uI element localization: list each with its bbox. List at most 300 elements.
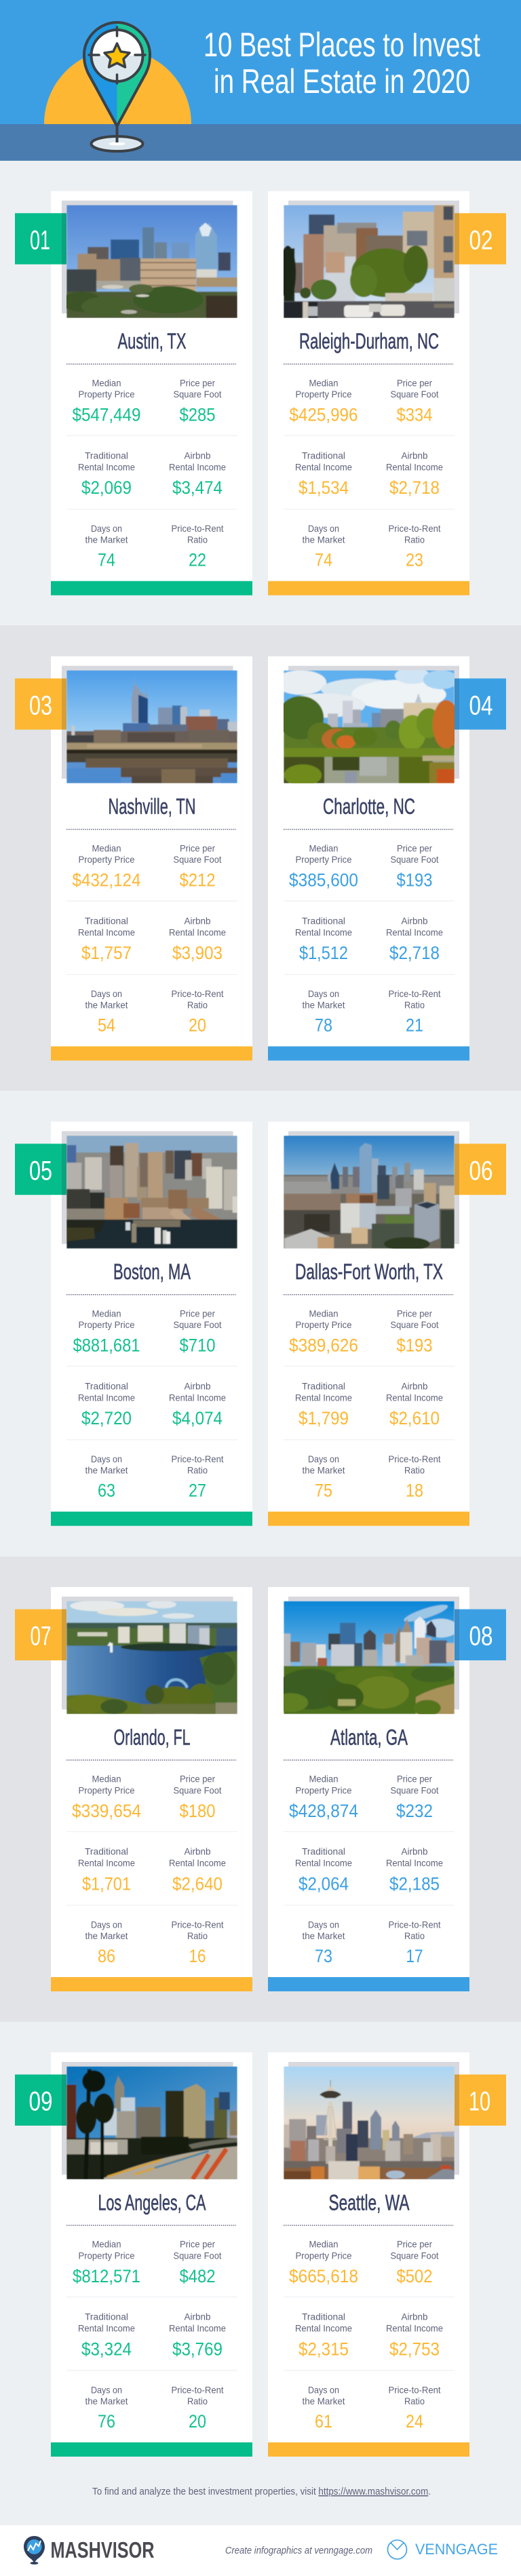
stat: price per square foot: $482 (179, 2266, 216, 2286)
icon: orange sun arch (44, 50, 191, 124)
stat: traditional rental income: $1,757 (81, 943, 132, 963)
card 02: Raleigh-Durham (268, 191, 506, 596)
stat: traditional rental income: Traditional (85, 450, 128, 461)
stat: days on the market: the Market (303, 1930, 345, 1941)
stat: airbnb rental income: Rental Income (386, 461, 443, 472)
stat: median property price: Property Price (296, 1319, 352, 1330)
stat: median property price (73, 2239, 140, 2286)
stat: days on the market: Days on (308, 523, 339, 534)
stat: price-to-rent ratio: Price-to-Rent (171, 523, 224, 534)
stat: traditional rental income: $1,512 (299, 943, 348, 963)
stat: traditional rental income: Traditional (85, 915, 128, 926)
colour bar (268, 1512, 469, 1526)
photo: Seattle skyline (284, 2066, 455, 2180)
stat: median property price: Median (92, 1774, 121, 1784)
stat: median property price (289, 377, 358, 425)
stat: median property price (72, 842, 141, 891)
stat: price-to-rent ratio: Price-to-Rent (171, 1919, 224, 1930)
header banner (0, 0, 521, 161)
stat: price-to-rent ratio (388, 988, 441, 1036)
stat: airbnb rental income: Airbnb (402, 450, 428, 461)
stat: traditional rental income: Rental Income (295, 461, 352, 472)
stat: airbnb rental income (169, 915, 226, 963)
rank badge 01 (15, 213, 66, 265)
stat: airbnb rental income (386, 450, 443, 498)
city name: Boston, MA (113, 1260, 191, 1284)
stat: traditional rental income (78, 450, 135, 498)
stat: price per square foot: Square Foot (174, 854, 222, 865)
stat: price-to-rent ratio: 27 (189, 1481, 206, 1501)
stat: median property price: Property Price (296, 2250, 352, 2261)
stat: airbnb rental income: Airbnb (402, 1380, 428, 1391)
rank badge 04 (455, 678, 506, 730)
stat: median property price: Median (309, 842, 338, 853)
title (204, 26, 480, 100)
stat: airbnb rental income: $2,718 (389, 943, 440, 963)
stat: price-to-rent ratio: 18 (406, 1481, 423, 1501)
stat: median property price: Median (92, 2239, 121, 2250)
stat: traditional rental income: $2,069 (81, 477, 132, 498)
stat: price-to-rent ratio: 24 (406, 2411, 423, 2432)
stat: price per square foot: Square Foot (391, 389, 439, 399)
stat: price per square foot (391, 377, 439, 425)
city name: Dallas-Fort Worth, TX (295, 1260, 443, 1284)
stat: median property price: Property Price (296, 389, 352, 399)
stat: traditional rental income: Rental Income (295, 1392, 352, 1403)
stat: price-to-rent ratio: 16 (189, 1946, 206, 1966)
colour bar (51, 1047, 252, 1061)
stat: price-to-rent ratio: Price-to-Rent (171, 1453, 224, 1464)
stat: days on the market: Days on (308, 1919, 339, 1930)
stat: median property price: Property Price (79, 1319, 135, 1330)
stat: price per square foot (391, 2239, 439, 2286)
stat: price per square foot (174, 842, 222, 891)
stat: price per square foot: Price per (180, 1774, 215, 1784)
stat: price-to-rent ratio (388, 1453, 441, 1501)
stat: price per square foot: $285 (179, 405, 216, 425)
stat: price-to-rent ratio (388, 1919, 441, 1966)
stat: price-to-rent ratio (388, 523, 441, 570)
rank badge 07 (15, 1609, 66, 1660)
stat: price per square foot (174, 377, 222, 425)
stat: price-to-rent ratio: Price-to-Rent (171, 2384, 224, 2395)
card 04: Charlotte (268, 657, 506, 1061)
stat: price per square foot: Square Foot (174, 2250, 222, 2261)
stat: days on the market: the Market (85, 1000, 128, 1011)
rank badge 05 (15, 1144, 66, 1195)
stat: traditional rental income: Traditional (302, 450, 345, 461)
stat: traditional rental income: Rental Income (78, 926, 135, 937)
rank badge 10: 10 (469, 2087, 490, 2117)
stat: airbnb rental income (169, 1846, 226, 1894)
stat: median property price: $665,618 (289, 2266, 358, 2286)
stat: airbnb rental income: Rental Income (169, 1392, 226, 1403)
stat: price per square foot: Price per (397, 2239, 432, 2250)
stat: airbnb rental income: $2,610 (389, 1408, 440, 1428)
stat: price-to-rent ratio: Ratio (404, 534, 425, 545)
stat: traditional rental income (295, 2311, 352, 2359)
stat: days on the market (85, 1919, 128, 1966)
stat: price per square foot: Square Foot (391, 1784, 439, 1795)
stat: days on the market: Days on (91, 523, 122, 534)
stat: price per square foot: Price per (180, 2239, 215, 2250)
stat: days on the market: 73 (315, 1946, 332, 1966)
stat: days on the market: the Market (303, 534, 345, 545)
stat: price per square foot: Square Foot (174, 1784, 222, 1795)
stat: price per square foot: Price per (180, 377, 215, 388)
card 01: Austin (15, 191, 252, 596)
stat: traditional rental income (295, 1380, 352, 1428)
colour bar (51, 1512, 252, 1526)
stat: traditional rental income (78, 2311, 135, 2359)
stat: traditional rental income: Rental Income (78, 1392, 135, 1403)
stat: days on the market: Days on (91, 988, 122, 999)
stat: median property price: $425,996 (289, 405, 358, 425)
stat: median property price: Median (309, 1308, 338, 1319)
stat: days on the market: 76 (98, 2411, 115, 2432)
stat: price-to-rent ratio: Price-to-Rent (171, 988, 224, 999)
icon: Mashvisor pin logo (24, 2536, 45, 2564)
stat: price-to-rent ratio (171, 988, 224, 1036)
rank badge 03: 03 (29, 690, 52, 720)
stat: airbnb rental income: $3,474 (172, 477, 223, 498)
photo: Boston harbor (66, 1135, 237, 1249)
stat: traditional rental income (295, 915, 352, 963)
stat: days on the market: 54 (98, 1015, 115, 1036)
stat: airbnb rental income (169, 2311, 226, 2359)
stat: days on the market: 61 (315, 2411, 332, 2432)
icon: map pin with star (84, 22, 150, 151)
stat: traditional rental income: Traditional (302, 1846, 345, 1857)
stat: traditional rental income (78, 1846, 135, 1894)
stat: airbnb rental income: Airbnb (185, 2311, 211, 2322)
rank badge 03 (15, 678, 66, 730)
stat: price-to-rent ratio: Price-to-Rent (388, 1919, 441, 1930)
stat: traditional rental income: Rental Income (295, 2323, 352, 2334)
stat: days on the market (303, 2384, 345, 2432)
stat: price per square foot: $212 (179, 870, 216, 891)
stat: airbnb rental income (386, 915, 443, 963)
stat: days on the market: the Market (303, 1000, 345, 1011)
stat: days on the market (85, 1453, 128, 1501)
stat: price-to-rent ratio: 20 (189, 2411, 206, 2432)
Mashvisor wordmark: MASHVISOR (50, 2537, 155, 2562)
stat: traditional rental income: Traditional (302, 915, 345, 926)
stat: price per square foot (391, 842, 439, 891)
photo: Austin skyline (66, 205, 237, 318)
stat: median property price: Median (309, 2239, 338, 2250)
stat: price per square foot: Price per (180, 842, 215, 853)
colour bar (268, 2442, 469, 2457)
colour bar (268, 1047, 469, 1061)
card 06: Dallas-Fort Worth (268, 1122, 506, 1526)
stat: median property price: Property Price (79, 389, 135, 399)
stat: price-to-rent ratio: Ratio (404, 1465, 425, 1476)
rank badge 02 (455, 213, 506, 265)
stat: days on the market: the Market (303, 2396, 345, 2406)
stat: median property price: $339,654 (72, 1801, 141, 1821)
stat: airbnb rental income: $2,185 (389, 1873, 440, 1894)
stat: median property price: $428,874 (289, 1801, 358, 1821)
stat: price-to-rent ratio (171, 1919, 224, 1966)
stat: price-to-rent ratio (171, 1453, 224, 1501)
stat: days on the market: 74 (98, 550, 115, 570)
stat: median property price: Median (92, 1308, 121, 1319)
stat: median property price: $812,571 (73, 2266, 140, 2286)
stat: median property price (289, 1308, 358, 1356)
stat: airbnb rental income: Rental Income (169, 926, 226, 937)
stat: traditional rental income: Traditional (302, 2311, 345, 2322)
colour bar (51, 1977, 252, 1991)
colour bar (268, 581, 469, 596)
stat: days on the market: Days on (308, 1453, 339, 1464)
stat: airbnb rental income: Rental Income (386, 1858, 443, 1869)
stat: traditional rental income: $1,799 (298, 1408, 349, 1428)
closing note: To find and analyze the best investment properties, visit https://www.mashvisor.com. (92, 2486, 431, 2497)
stat: days on the market: 78 (315, 1015, 332, 1036)
stat: median property price: Median (92, 842, 121, 853)
stat: price per square foot: Price per (180, 1308, 215, 1319)
stat: days on the market (303, 1453, 345, 1501)
stat: traditional rental income: $2,720 (81, 1408, 132, 1428)
stat: price-to-rent ratio: 17 (406, 1946, 423, 1966)
rank badge 04: 04 (469, 690, 493, 720)
stat: price-to-rent ratio (171, 523, 224, 570)
stat: price-to-rent ratio: Ratio (404, 1000, 425, 1011)
rank badge 06: 06 (469, 1156, 493, 1186)
stat: days on the market: Days on (91, 1919, 122, 1930)
photo: Nashville riverfront (66, 670, 237, 783)
Venngage wordmark: VENNGAGE (415, 2541, 498, 2558)
stat: price-to-rent ratio: Ratio (404, 1930, 425, 1941)
stat: days on the market: Days on (308, 988, 339, 999)
stat: price-to-rent ratio: Price-to-Rent (388, 2384, 441, 2395)
colour bar (268, 1977, 469, 1991)
card 08: Atlanta (268, 1587, 506, 1991)
stat: traditional rental income: Rental Income (78, 1858, 135, 1869)
city name: Charlotte, NC (323, 794, 415, 819)
stat: median property price (289, 2239, 358, 2286)
stat: airbnb rental income: $2,640 (172, 1873, 223, 1894)
stat: price per square foot: $710 (179, 1335, 216, 1356)
stat: price per square foot: Square Foot (391, 1319, 439, 1330)
stat: median property price: $881,681 (73, 1335, 140, 1356)
stat: price per square foot (174, 1774, 222, 1821)
stat: price-to-rent ratio: 23 (406, 550, 423, 570)
photo: Raleigh street (284, 205, 455, 318)
stat: airbnb rental income: Rental Income (386, 2323, 443, 2334)
stat: airbnb rental income: Airbnb (185, 1380, 211, 1391)
stat: days on the market: Days on (91, 2384, 122, 2395)
stat: traditional rental income: Traditional (85, 1846, 128, 1857)
city name: Austin, TX (118, 329, 186, 353)
stat: days on the market (85, 523, 128, 570)
stat: days on the market: the Market (85, 1465, 128, 1476)
stat: price-to-rent ratio: Ratio (187, 2396, 208, 2406)
stat: price-to-rent ratio (171, 2384, 224, 2432)
stat: median property price (72, 377, 141, 425)
stat: days on the market: the Market (85, 1930, 128, 1941)
city name: Nashville, TN (109, 794, 195, 819)
stat: traditional rental income (295, 1846, 352, 1894)
stat: price per square foot: Square Foot (391, 854, 439, 865)
stat: airbnb rental income: Rental Income (169, 1858, 226, 1869)
stat: price per square foot: $193 (396, 1335, 433, 1356)
stat: airbnb rental income (386, 1846, 443, 1894)
stat: days on the market (303, 988, 345, 1036)
stat: median property price (289, 842, 358, 891)
stat: days on the market: Days on (308, 2384, 339, 2395)
stat: price per square foot: $334 (396, 405, 433, 425)
stat: price per square foot: $180 (179, 1801, 216, 1821)
Venngage credit: Create infographics at venngage.com (225, 2545, 372, 2556)
stat: days on the market (85, 988, 128, 1036)
stat: days on the market: the Market (85, 2396, 128, 2406)
stat: airbnb rental income: Airbnb (185, 450, 211, 461)
stat: airbnb rental income: $2,718 (389, 477, 440, 498)
photo: Los Angeles freeway (66, 2066, 237, 2180)
stat: median property price: Property Price (296, 1784, 352, 1795)
stat: price per square foot: $232 (396, 1801, 433, 1821)
stat: days on the market: 63 (98, 1481, 115, 1501)
stat: traditional rental income: $2,315 (298, 2339, 349, 2359)
card 09: Los Angeles (15, 2052, 252, 2457)
rank badge 07: 07 (30, 1622, 52, 1652)
stat: price per square foot: $502 (396, 2266, 433, 2286)
photo: Dallas skyline (284, 1135, 455, 1249)
stat: airbnb rental income: Airbnb (402, 915, 428, 926)
stat: median property price: Median (309, 1774, 338, 1784)
rank badge 09 (15, 2075, 66, 2126)
rank badge 10 (455, 2075, 506, 2126)
stat: airbnb rental income (386, 2311, 443, 2359)
photo: Atlanta skyline (284, 1601, 455, 1715)
stat: traditional rental income (78, 915, 135, 963)
stat: price per square foot (391, 1308, 439, 1356)
city name: Atlanta, GA (330, 1725, 408, 1749)
rank badge 05: 05 (29, 1156, 52, 1186)
rank badge 08 (455, 1609, 506, 1660)
stat: median property price: Median (309, 377, 338, 388)
stat: price per square foot: Square Foot (174, 389, 222, 399)
stat: traditional rental income: Traditional (85, 1380, 128, 1391)
stat: price-to-rent ratio: 21 (406, 1015, 423, 1036)
stat: airbnb rental income: $3,769 (172, 2339, 223, 2359)
rank badge 09: 09 (28, 2087, 53, 2117)
stat: airbnb rental income: Rental Income (386, 926, 443, 937)
stat: price-to-rent ratio: Price-to-Rent (388, 523, 441, 534)
stat: median property price: Property Price (79, 1784, 135, 1795)
stat: days on the market: 74 (315, 550, 332, 570)
stat: airbnb rental income: Airbnb (185, 915, 211, 926)
stat: median property price (72, 1774, 141, 1821)
colour bar (51, 2442, 252, 2457)
stat: price-to-rent ratio: 22 (189, 550, 206, 570)
stat: days on the market: the Market (303, 1465, 345, 1476)
stat: airbnb rental income: Rental Income (386, 1392, 443, 1403)
stat: price per square foot: Price per (397, 842, 432, 853)
stat: price-to-rent ratio: 20 (189, 1015, 206, 1036)
stat: airbnb rental income (169, 1380, 226, 1428)
stat: median property price: Median (92, 377, 121, 388)
colour bar (51, 581, 252, 596)
rank badge 06 (455, 1144, 506, 1195)
stat: traditional rental income (295, 450, 352, 498)
stat: days on the market (303, 523, 345, 570)
card 07: Orlando (15, 1587, 252, 1991)
stat: median property price (289, 1774, 358, 1821)
stat: days on the market: 75 (315, 1481, 332, 1501)
stat: traditional rental income: Rental Income (295, 1858, 352, 1869)
stat: median property price: Property Price (79, 2250, 135, 2261)
icon: Venngage logo mark (388, 2540, 407, 2559)
stat: price per square foot: Price per (397, 1774, 432, 1784)
stat: traditional rental income: $1,701 (82, 1873, 131, 1894)
card 10: Seattle (268, 2052, 506, 2457)
stat: days on the market: the Market (85, 534, 128, 545)
stat: price per square foot: Square Foot (174, 1319, 222, 1330)
stat: traditional rental income: Traditional (302, 1380, 345, 1391)
stat: price per square foot: Square Foot (391, 2250, 439, 2261)
stat: airbnb rental income: $2,753 (389, 2339, 440, 2359)
stat: airbnb rental income: Airbnb (185, 1846, 211, 1857)
stat: median property price: $547,449 (72, 405, 141, 425)
stat: traditional rental income: $2,064 (298, 1873, 349, 1894)
stat: price-to-rent ratio (388, 2384, 441, 2432)
stat: airbnb rental income (386, 1380, 443, 1428)
stat: traditional rental income: Rental Income (295, 926, 352, 937)
stat: price per square foot (391, 1774, 439, 1821)
stat: price-to-rent ratio: Ratio (187, 1930, 208, 1941)
stat: days on the market: Days on (91, 1453, 122, 1464)
stat: price per square foot (174, 1308, 222, 1356)
stat: price-to-rent ratio: Price-to-Rent (388, 988, 441, 999)
city name: Raleigh-Durham, NC (299, 329, 439, 353)
stat: airbnb rental income: Rental Income (169, 461, 226, 472)
stat: airbnb rental income: Airbnb (402, 2311, 428, 2322)
photo: Orlando lake (66, 1601, 237, 1715)
stat: price-to-rent ratio: Ratio (404, 2396, 425, 2406)
stat: price per square foot: $193 (396, 870, 433, 891)
stat: airbnb rental income (169, 450, 226, 498)
stat: days on the market (85, 2384, 128, 2432)
stat: traditional rental income: Rental Income (78, 2323, 135, 2334)
footer (0, 2525, 521, 2576)
rank badge 08: 08 (469, 1622, 493, 1652)
stat: traditional rental income: $3,324 (81, 2339, 132, 2359)
rank badge 02: 02 (469, 225, 493, 255)
stat: traditional rental income (78, 1380, 135, 1428)
stat: price per square foot (174, 2239, 222, 2286)
stat: price-to-rent ratio: Price-to-Rent (388, 1453, 441, 1464)
city name: Seattle, WA (328, 2190, 410, 2214)
city name: Los Angeles, CA (98, 2190, 206, 2214)
stat: price-to-rent ratio: Ratio (187, 534, 208, 545)
stat: price-to-rent ratio: Ratio (187, 1465, 208, 1476)
stat: median property price: $432,124 (72, 870, 141, 891)
stat: median property price: Property Price (79, 854, 135, 865)
stat: median property price (73, 1308, 140, 1356)
stat: traditional rental income: $1,534 (298, 477, 349, 498)
stat: price-to-rent ratio: Ratio (187, 1000, 208, 1011)
city name: Orlando, FL (114, 1725, 190, 1749)
stat: airbnb rental income: $3,903 (172, 943, 223, 963)
stat: price per square foot: Price per (397, 377, 432, 388)
stat: days on the market: 86 (98, 1946, 115, 1966)
stat: airbnb rental income: $4,074 (172, 1408, 223, 1428)
stat: price per square foot: Price per (397, 1308, 432, 1319)
card 05: Boston (15, 1122, 252, 1526)
